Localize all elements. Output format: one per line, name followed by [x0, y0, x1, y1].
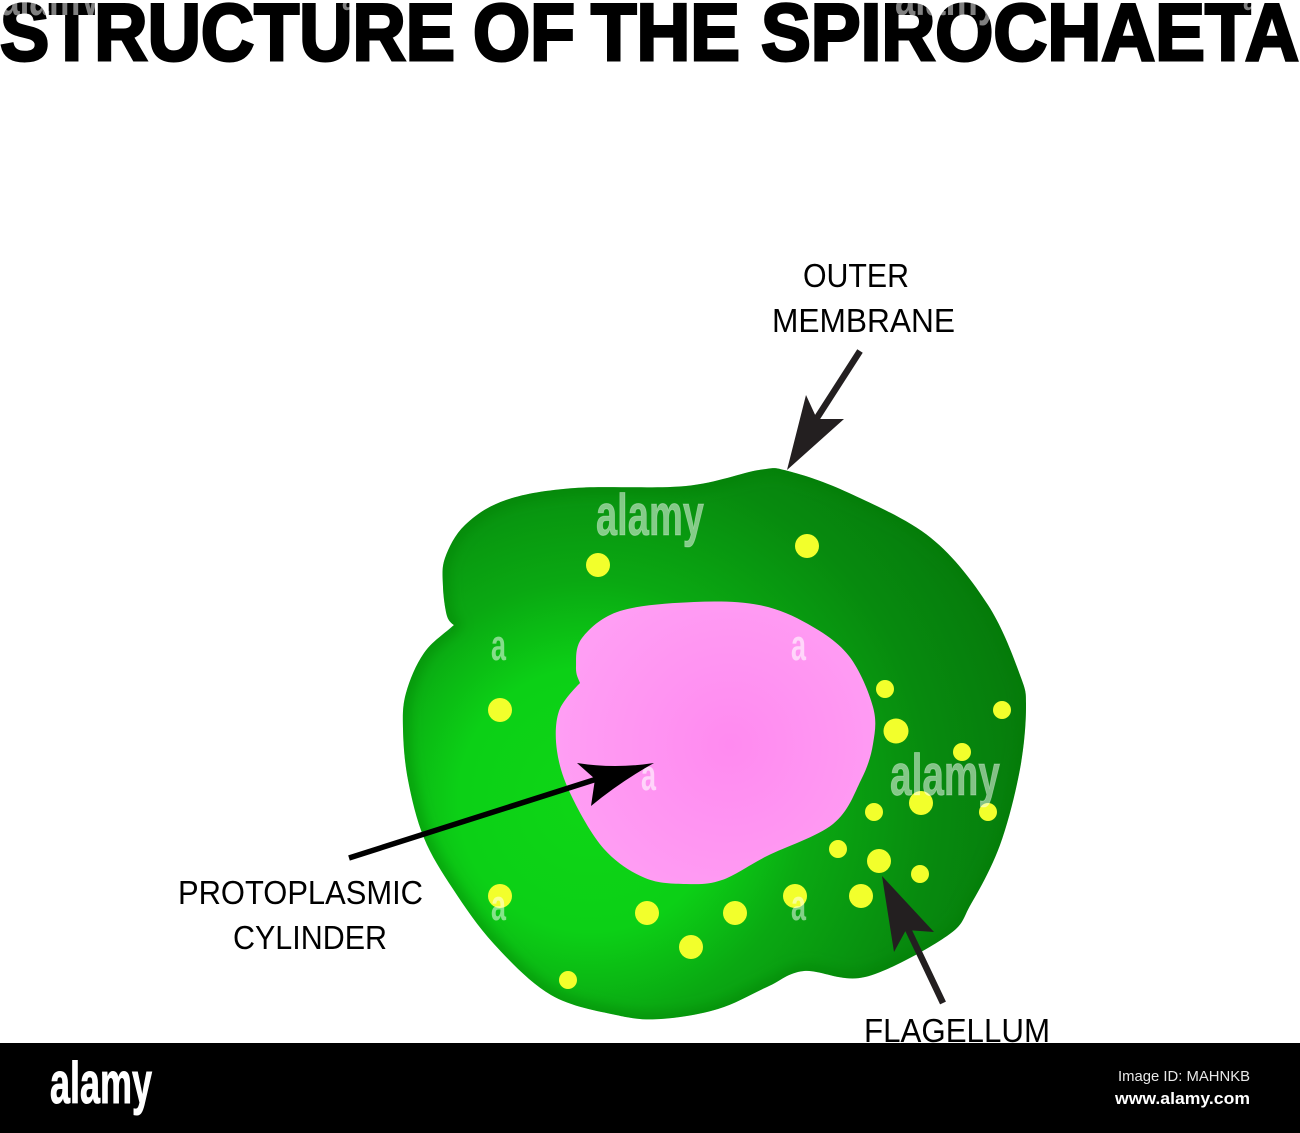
- image id: Image ID: MAHNKB: [1118, 1068, 1250, 1085]
- title: [0, 0, 1299, 78]
- watermarks on diagram: alamy: [596, 483, 704, 548]
- arrow: protoplasmic cylinder: [349, 763, 654, 858]
- site url: www.alamy.com: [1114, 1089, 1250, 1108]
- label: outer membrane: OUTER: [803, 257, 909, 294]
- watermark over title: [0, 0, 1257, 26]
- label: protoplasmic cylinder: PROTOPLASMIC: [178, 874, 423, 911]
- arrow: outer membrane: [787, 351, 860, 470]
- cell diagram: cross-section of the spirochaeta: [395, 460, 1035, 1030]
- watermarks on diagram: a: [641, 751, 656, 800]
- watermarks on diagram: a: [491, 621, 506, 670]
- label: protoplasmic cylinder: CYLINDER: [233, 919, 387, 956]
- watermarks on diagram: a: [791, 621, 806, 670]
- protoplasmic cylinder: [556, 602, 875, 884]
- watermarks on diagram: alamy: [890, 743, 1000, 808]
- label: outer membrane: [772, 257, 955, 339]
- label: protoplasmic cylinder: [178, 874, 423, 956]
- outer membrane body: [395, 460, 1035, 1030]
- watermarks on diagram: a: [791, 881, 806, 930]
- watermarks on diagram: [491, 483, 1000, 930]
- label: flagellum: FLAGELLUM: [864, 1012, 1050, 1049]
- flagella dots: [488, 534, 1011, 989]
- footer bar: [0, 1043, 1300, 1133]
- footer logo: alamy: [50, 1051, 152, 1116]
- watermarks on diagram: a: [491, 881, 506, 930]
- arrow: flagellum: [882, 876, 943, 1003]
- label: outer membrane: MEMBRANE: [772, 302, 955, 339]
